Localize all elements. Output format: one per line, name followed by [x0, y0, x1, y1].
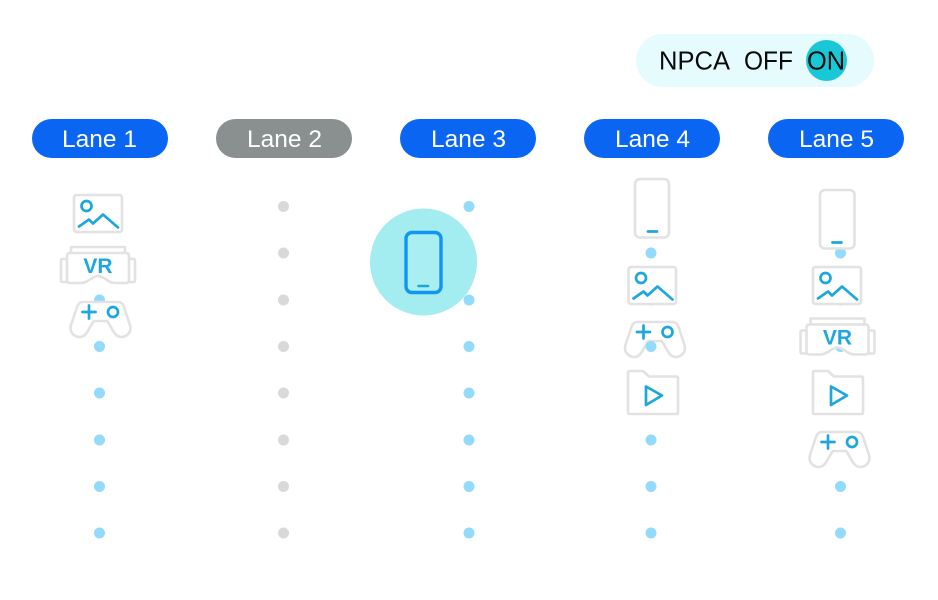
lane 5 header: Lane 5 [799, 126, 874, 153]
lane 4 icon: phone [635, 179, 669, 238]
lane 5 icon: video folder [813, 371, 863, 414]
lane 1 icon: VR headset: VR [83, 255, 113, 278]
lane 4 icon: video folder [628, 371, 678, 414]
lane 5 icon: image [813, 267, 861, 304]
NPCA toggle: NPCA [659, 46, 731, 76]
lane 1 icon: game controller [71, 302, 130, 337]
lane 3 dots [464, 201, 474, 538]
lane 2 dots [278, 201, 289, 538]
lane 1 header: Lane 1 [62, 126, 137, 153]
lane 4 dot over controller [646, 341, 656, 352]
lane 4 header [584, 119, 720, 158]
lane 4 header: Lane 4 [615, 126, 690, 153]
NPCA toggle: ON [807, 46, 845, 76]
lane 3 header: Lane 3 [431, 126, 506, 153]
lane 5 icon: VR headset [800, 318, 874, 354]
lane 1 icon: VR headset [61, 247, 135, 283]
lane 3 active device: phone in circle [370, 208, 477, 316]
lane 1 header [32, 119, 168, 158]
lane 5 icon: phone [820, 190, 854, 248]
lane 5 icon: VR headset: VR [823, 326, 852, 350]
lane 1 dots [94, 294, 105, 538]
lane 5 dots [835, 248, 846, 538]
lane 3 header [400, 119, 536, 158]
NPCA toggle: OFF [744, 46, 793, 76]
lane 5 header [768, 119, 904, 158]
NPCA toggle [636, 34, 874, 87]
lane 4 icon: game controller [625, 322, 685, 357]
lane 4 icon: image [628, 267, 676, 304]
lane 2 header [216, 119, 352, 158]
lane 1 icon: image [74, 195, 122, 232]
lane 5 icon: game controller [810, 432, 869, 467]
lane 2 header: Lane 2 [247, 126, 322, 153]
lane 4 dots [646, 248, 656, 538]
